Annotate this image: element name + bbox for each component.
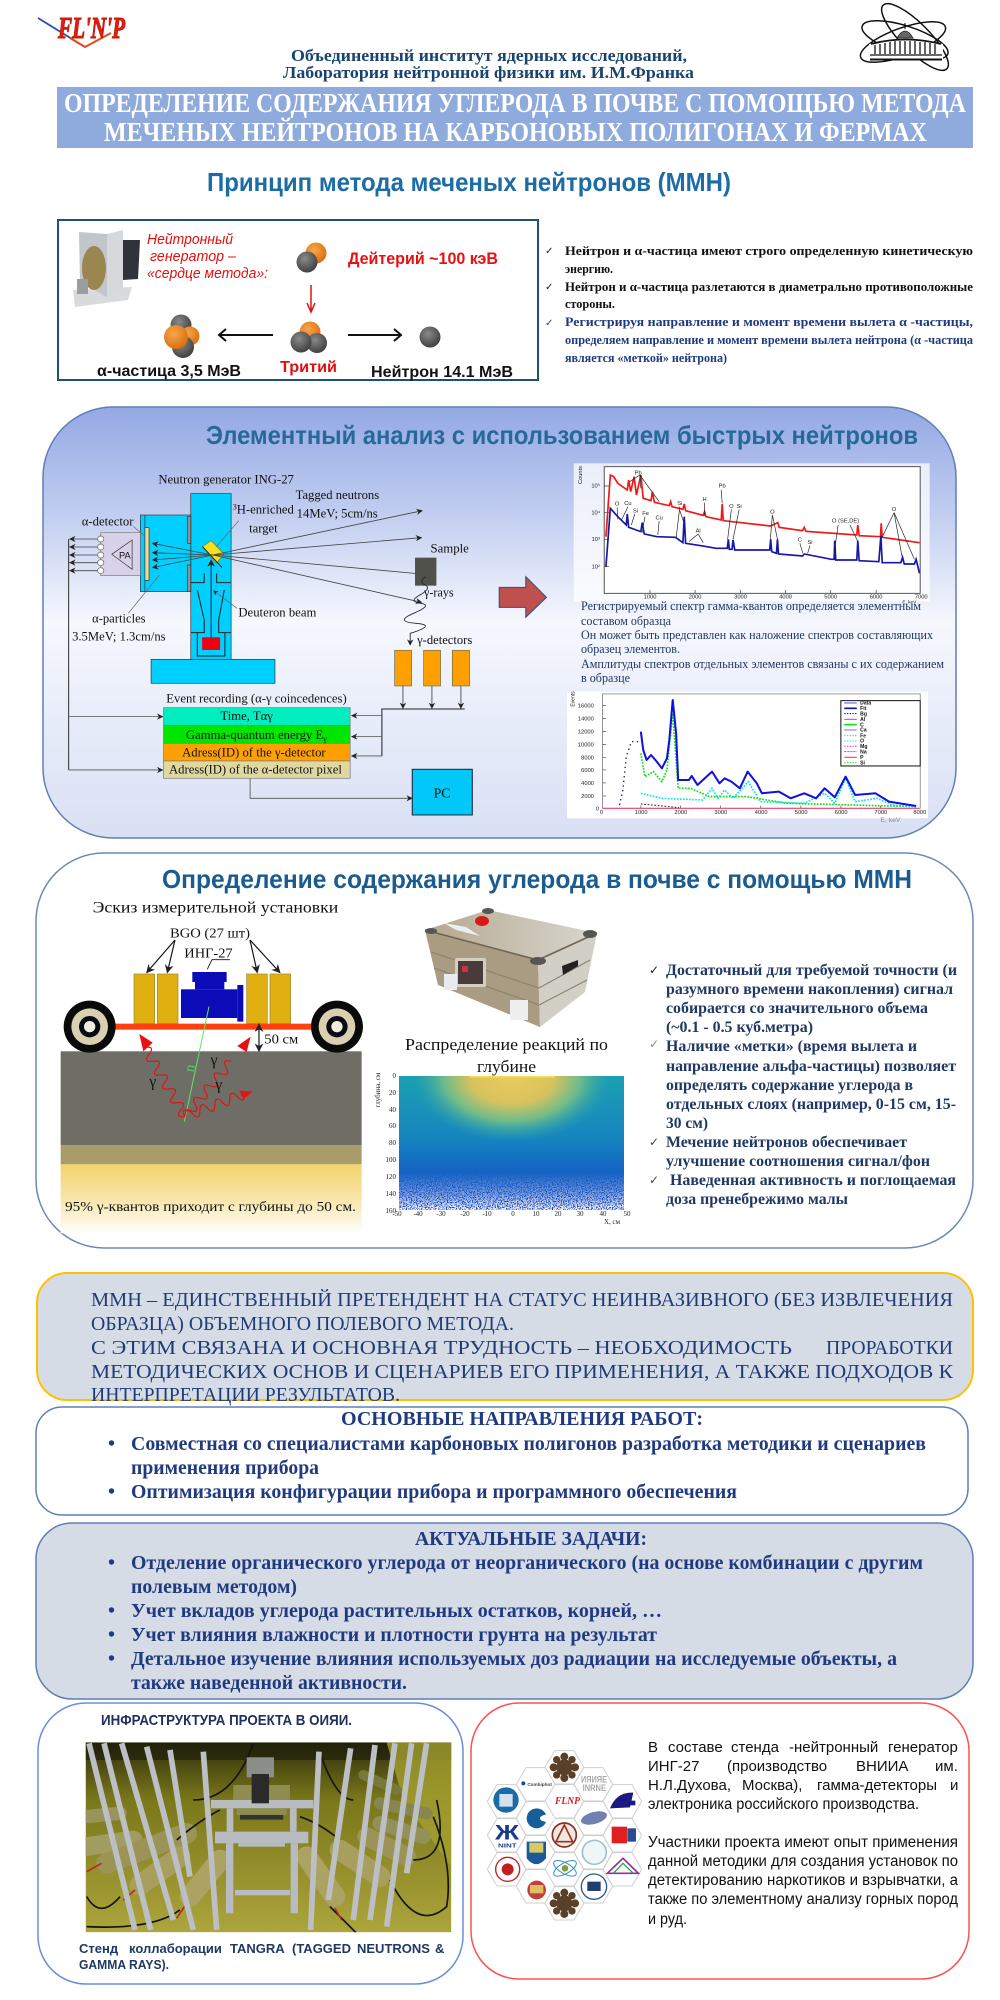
panel: main directions: •: [108, 1481, 115, 1503]
panel: main directions: •: [108, 1433, 115, 1455]
chart: depth heatmap: 0: [392, 1072, 396, 1080]
detector labels: 50 см: [264, 1032, 298, 1047]
generator labels: Deuteron beam: [238, 605, 317, 620]
panel: MMN statement: ИНТЕРПРЕТАЦИИ РЕЗУЛЬТАТОВ.: [91, 1384, 400, 1406]
generator body: [140, 494, 275, 683]
chart: fitted element spectra: 2000: [674, 810, 687, 816]
panel: current tasks: полевым методом): [131, 1576, 297, 1598]
caption: TANGRA: NEUTRONS: [357, 1941, 430, 1956]
heading: principle of the method: Принцип метода меченых нейтронов (ММН): [207, 167, 731, 197]
detector labels: [147, 927, 298, 1051]
chart: depth heatmap: 120: [386, 1173, 396, 1181]
chart: measured spectra: 2000: [689, 595, 701, 601]
text block: method advantages: [649, 962, 957, 1208]
panel: current tasks: •: [108, 1600, 115, 1622]
chart: fitted element spectra: 14000: [578, 717, 594, 723]
text block: method advantages: определять содержание углерода в: [666, 1077, 913, 1094]
text block: stand composition: составе: [668, 1739, 723, 1756]
PC box: [250, 769, 472, 815]
chart: fitted element spectra: 16000: [578, 704, 594, 710]
soil layers: [61, 1051, 362, 1233]
target: [202, 541, 224, 567]
event recording table: γ: [322, 735, 327, 744]
caption: reaction distribution: глубине: [477, 1057, 536, 1076]
panel: main directions: Оптимизация конфигурации прибора и программного обеспечения: [131, 1481, 737, 1503]
text block: spectrum explanation: Амплитуды спектров отдельных элементов связаны с их содержанием: [581, 656, 944, 671]
text block: method advantages: направление альфа-частицы) позволяет: [666, 1058, 956, 1075]
neutron and gamma paths: γ: [148, 1074, 156, 1091]
preamplifier: [69, 533, 163, 770]
chart: depth heatmap: 30: [576, 1210, 584, 1218]
depth note: 95% γ-квантов приходит с глубины до 50 см.: [65, 1200, 356, 1215]
chart legend: Data: [860, 701, 871, 707]
chart: fitted element spectra: 8000: [581, 755, 594, 761]
panel: JINR infrastructure: [38, 1703, 463, 1984]
chart: measured spectra: E, keV: [902, 599, 917, 604]
text: neutron generator note: Нейтронный: [147, 231, 234, 248]
chart: fitted element spectra: 0: [600, 810, 603, 816]
text block: stand composition: Н.Л.Духова,: [648, 1777, 731, 1794]
chart: depth heatmap: 40: [389, 1106, 396, 1114]
text block: method advantages: Наведенная активность и поглощаемая: [670, 1172, 956, 1189]
chart: measured spectra: Counts: [578, 466, 584, 484]
panel: current tasks: Учет влияния влажности и плотности грунта на результат: [131, 1624, 657, 1646]
chart legend: P: [860, 755, 864, 761]
chart: measured spectra: O: [729, 504, 734, 510]
neutron and gamma paths: γ: [210, 1052, 218, 1069]
chart: fitted element spectra: 5000: [795, 810, 808, 816]
chart legend: Mg: [860, 744, 868, 750]
caption: TANGRA: &: [435, 1941, 444, 1956]
chart: measured spectra: O: [615, 502, 620, 508]
chart legend: Ca: [860, 728, 867, 734]
header: institute name: [283, 46, 695, 82]
chart: measured spectra: 7000: [915, 595, 928, 601]
chart: measured spectra: C: [798, 538, 802, 544]
chart: fitted element spectra: 3000: [714, 810, 727, 816]
text block: method advantages: Наличие «метки» (время вылета и: [666, 1038, 917, 1055]
chart: measured spectra: 10²: [592, 564, 600, 570]
caption: TANGRA: TANGRA: [230, 1941, 285, 1956]
panel: main directions: [36, 1407, 968, 1515]
central stand: [211, 1800, 313, 1913]
detector labels: BGO (27 шт): [170, 927, 250, 942]
chart: measured spectra: 10³: [592, 537, 600, 543]
text block: method advantages: отдельных слоях (например, 0-15 см, 15-: [666, 1096, 956, 1113]
text block: spectrum explanation: образец элементов.: [581, 641, 680, 656]
text block: stand composition: детектированию наркотиков и взрывчатки, а: [648, 1872, 958, 1889]
text block: method advantages: ✓: [649, 963, 659, 977]
photo: TANGRA stand: [86, 1742, 451, 1933]
generator labels: Neutron generator ING-27: [158, 472, 294, 486]
panel: MMN statement: МЕТОДИЧЕСКИХ ОСНОВ И СЦЕНАРИЕВ ЕГО ПРИМЕНЕНИЯ, А ТАКЖЕ ПОДХОДОВ К: [91, 1361, 954, 1383]
text block: principle checklist: Регистрируя направление и момент времени вылета α -частицы,: [565, 314, 973, 329]
text block: stand composition: ВНИИА: [856, 1758, 908, 1775]
arrow: deuterium to tritium: [307, 285, 315, 312]
chart: depth heatmap: 80: [389, 1139, 396, 1147]
chart: measured spectra: 5000: [824, 595, 837, 601]
chart: measured spectra: [574, 463, 930, 604]
text block: spectrum explanation: в образце: [581, 670, 630, 685]
panel: MMN statement: ПРОРАБОТКИ: [826, 1337, 953, 1359]
text block: stand composition: им.: [935, 1758, 958, 1775]
panel: MMN statement: ОБРАЗЦА) ОБЪЕМНОГО ПОЛЕВОГО МЕТОДА.: [91, 1313, 514, 1335]
panel: current tasks: Отделение органического углерода от неорганического (на основе комбинации с другим: [131, 1552, 923, 1574]
text block: stand composition: [648, 1739, 958, 1928]
text block: stand composition: (производство: [727, 1758, 827, 1775]
chart: measured spectra: H: [703, 497, 707, 503]
title banner: [57, 87, 973, 148]
logos: participant hexagons: INRNE: [583, 1783, 606, 1793]
text block: principle checklist: является «меткой» нейтрона): [565, 350, 727, 365]
chart legend: Si: [860, 760, 866, 766]
text block: method advantages: ✓: [649, 1173, 659, 1187]
neutron and gamma paths: γ: [214, 1076, 222, 1093]
chart legend: [841, 701, 920, 766]
text block: principle checklist: Нейтрон и α-частица разлетаются в диаметрально противоположные: [565, 279, 973, 294]
text: neutron generator note: [147, 231, 268, 282]
chart: measured spectra: Si: [807, 540, 813, 546]
arrow: to neutron: [348, 329, 401, 341]
chart: depth heatmap: 50: [624, 1210, 631, 1218]
chart: fitted element spectra: 1000: [635, 810, 648, 816]
caption: reaction distribution: Распределение реакций по: [405, 1035, 608, 1054]
logos: participant hexagons: [487, 1751, 642, 1920]
chart: measured spectra: Cu: [655, 515, 663, 521]
chart: measured spectra: Si: [633, 508, 638, 514]
chart: depth heatmap: 40: [600, 1210, 607, 1218]
text block: stand composition: электроника российского производства.: [648, 1796, 919, 1813]
arrow: to spectra: [499, 577, 546, 617]
caption: TANGRA: Стенд: [79, 1941, 119, 1956]
caption: TANGRA: GAMMA RAYS).: [79, 1957, 169, 1972]
caption: TANGRA: [79, 1941, 444, 1972]
text block: method advantages: разумного времени накопления) сигнал: [666, 981, 953, 998]
particle rays: [152, 511, 422, 602]
chart: measured spectra: Si: [677, 501, 682, 507]
text: neutron generator note: «сердце метода»:: [147, 265, 268, 282]
label: tritium: Тритий: [280, 359, 337, 376]
event recording table: Gamma-quantum energy E: [186, 727, 331, 742]
text block: stand composition: генератор: [888, 1739, 958, 1756]
logo: JINR: [856, 0, 957, 79]
text block: method advantages: ✓: [649, 1135, 659, 1149]
chart: fitted element spectra: 4000: [581, 781, 594, 787]
generator labels: α-detector: [82, 514, 134, 528]
text block: stand composition: Москва),: [742, 1777, 802, 1794]
heading: elemental analysis: Элементный анализ с использованием быстрых нейтронов: [206, 420, 918, 450]
chart: depth heatmap: 140: [386, 1190, 396, 1198]
generator labels: 14MeV; 5cm/ns: [297, 506, 378, 520]
generator labels: Event recording (α-γ coincedences): [166, 691, 347, 706]
text block: principle checklist: ✓: [545, 282, 553, 293]
panel: current tasks: также наведенной активности.: [131, 1672, 407, 1694]
text block: stand composition: гамма-детекторы: [817, 1777, 937, 1794]
icon: alpha particle: [164, 314, 200, 358]
generator labels: [72, 472, 472, 706]
panel: current tasks: Учет вкладов углерода растительных остатков, корней, …: [131, 1600, 662, 1622]
chart: fitted element spectra: 0: [596, 807, 599, 813]
text block: stand composition: данной методики для создания установок по: [648, 1853, 958, 1870]
panel: main directions: Совместная со специалистами карбоновых полигонов разработка методики и сценариев: [131, 1433, 926, 1455]
chart: fitted element spectra: Events: [570, 691, 576, 707]
text block: method advantages: Достаточный для требуемой точности (и: [666, 962, 957, 979]
panel: current tasks: АКТУАЛЬНЫЕ ЗАДАЧИ:: [415, 1528, 647, 1550]
logo: FLNP: FL'N'P: [57, 10, 126, 45]
chart: measured spectra: 4000: [779, 595, 792, 601]
chart: fitted element spectra: 7000: [874, 810, 887, 816]
chart: measured spectra: Fe: [642, 511, 649, 517]
arrow: to alpha particle: [219, 329, 273, 341]
text block: spectrum explanation: Он может быть представлен как наложение спектров составляющих: [581, 627, 933, 642]
chart: measured spectra: 10⁵: [591, 483, 601, 490]
chart: measured spectra: Pb: [635, 471, 642, 477]
panel: elemental analysis: [43, 407, 956, 838]
text block: stand composition: стенда: [731, 1739, 780, 1756]
text block: method advantages: доза пренебрежимо малы: [666, 1191, 849, 1208]
event recording table: Adress(ID) of the α-detector pixel: [169, 762, 342, 776]
chart: depth heatmap: 60: [389, 1122, 396, 1130]
logos: participant hexagons: ИЯИЯЕ: [581, 1775, 607, 1785]
text block: principle checklist: Нейтрон и α-частица имеют строго определенную кинетическую: [565, 243, 973, 258]
caption: reaction distribution: [405, 1035, 608, 1076]
chart: measured spectra: Si: [737, 504, 742, 510]
event recording table: Time, Tαγ: [220, 708, 273, 723]
neutron and gamma paths: n: [182, 1062, 199, 1073]
panel: MMN statement: ММН – ЕДИНСТВЕННЫЙ ПРЕТЕНДЕНТ НА СТАТУС НЕИНВАЗИВНОГО (БЕЗ ИЗВЛЕЧЕНИЯ: [91, 1288, 953, 1311]
text block: method advantages: ✓: [649, 1037, 659, 1051]
label: alpha particle energy: α-частица 3,5 МэВ: [97, 363, 241, 380]
logo: FLNP: [38, 10, 126, 47]
preamplifier: PA: [119, 550, 132, 560]
heading: carbon determination: Определение содержания углерода в почве с помощью ММН: [162, 864, 912, 894]
chart: depth heatmap: 20: [554, 1210, 562, 1218]
chart legend: Bg: [860, 711, 867, 717]
chart: fitted element spectra: 6000: [581, 768, 594, 774]
chart: fitted element spectra: 2000: [581, 794, 594, 800]
chart: measured spectra: 10⁴: [591, 509, 601, 516]
caption: TANGRA: коллаборации: [129, 1941, 222, 1956]
cables: [87, 1743, 448, 1933]
chart: depth heatmap: X, см: [604, 1218, 621, 1226]
panel: MMN statement: С ЭТИМ СВЯЗАНА И ОСНОВНАЯ ТРУДНОСТЬ – НЕОБХОДИМОСТЬ: [91, 1337, 792, 1359]
chart legend: Al: [860, 717, 866, 723]
logos: participant hexagons: NINT: [498, 1844, 518, 1850]
text block: stand composition: и руд.: [648, 1911, 687, 1928]
text block: stand composition: и: [950, 1777, 958, 1794]
chart: fitted element spectra: E, keV: [881, 817, 901, 824]
chart: measured spectra: 1000: [644, 595, 656, 601]
chart: depth heatmap: 20: [389, 1089, 396, 1097]
chart: depth heatmap: 160: [386, 1207, 396, 1215]
panel: tagged neutron principle diagram: [58, 220, 538, 381]
chart: measured spectra: O (SE,DE): [832, 519, 859, 525]
panel: stand composition and participants: [471, 1703, 969, 1979]
chart: depth heatmap: глубина, см: [374, 1072, 382, 1107]
setup caption: Эскиз измерительной установки: [93, 900, 339, 917]
chart: fitted element spectra: 4000: [755, 810, 768, 816]
text block: spectrum explanation: Регистрируемый спектр гамма-квантов определяется элементным: [581, 598, 921, 613]
event recording table: [164, 708, 350, 778]
panel: carbon determination: [36, 853, 973, 1248]
icon: neutron generator: [73, 230, 140, 307]
text block: principle checklist: ✓: [545, 246, 553, 257]
diagram: neutron generator setup: [69, 472, 546, 815]
generator labels: α-particles: [92, 611, 146, 625]
text block: principle checklist: определяем направление и момент времени вылета нейтрона (α -частица: [565, 332, 973, 347]
text block: stand composition: ИНГ-27: [648, 1758, 699, 1775]
generator labels: Tagged neutrons: [296, 487, 379, 502]
text block: spectrum explanation: составом образца: [581, 613, 671, 628]
panel: main directions: ОСНОВНЫЕ НАПРАВЛЕНИЯ РАБОТ:: [341, 1408, 703, 1430]
generator labels: 3: [233, 502, 237, 511]
caption: TANGRA: (TAGGED: [292, 1941, 351, 1956]
detector cylinders: [86, 1775, 427, 1897]
chart: measured spectra: Pb: [719, 483, 726, 489]
chart: fitted element spectra: 10000: [578, 743, 594, 749]
header: institute name: Лаборатория нейтронной физики им. И.М.Франка: [283, 63, 695, 82]
chart: fitted element spectra: 8000: [913, 810, 926, 816]
panel: current tasks: [36, 1523, 973, 1699]
text block: principle checklist: энергию.: [565, 261, 613, 276]
chart: depth heatmap: -50: [392, 1210, 402, 1218]
diagram: measuring setup sketch: [61, 900, 363, 1233]
text block: stand composition: В: [648, 1739, 658, 1756]
cart with detectors: [64, 972, 363, 1053]
chart: depth heatmap: 10: [532, 1210, 540, 1218]
header: institute name: Объединенный институт ядерных исследований,: [291, 46, 687, 65]
chart: fitted element spectra: 6000: [835, 810, 848, 816]
text block: principle checklist: [545, 243, 973, 365]
text: neutron generator note: генератор –: [150, 248, 237, 265]
text block: stand composition: -нейтронный: [789, 1739, 878, 1756]
chart: depth heatmap: -30: [436, 1210, 446, 1218]
logos: participant hexagons: FLNP: [554, 1796, 581, 1807]
aluminium rods: [89, 1743, 427, 1930]
panel: MMN statement: [37, 1273, 973, 1406]
logos: participant hexagons: Ж: [494, 1820, 520, 1844]
logos: participant hexagons: Combiphot: [527, 1782, 552, 1787]
text block: method advantages: улучшение соотношения сигнал/фон: [666, 1153, 930, 1170]
chart: depth heatmap: -10: [482, 1210, 492, 1218]
icon: tritium nucleus: [290, 322, 327, 353]
chart legend: Fit: [860, 706, 867, 712]
chart: depth heatmap: 100: [386, 1156, 396, 1164]
heading: infrastructure: ИНФРАСТРУКТУРА ПРОЕКТА В ОИЯИ.: [101, 1712, 352, 1729]
chart: measured spectra: 6000: [870, 595, 883, 601]
text block: stand composition: Участники проекта имеют опыт применения: [648, 1834, 958, 1851]
chart legend: O: [860, 739, 864, 745]
chart: fitted element spectra: [567, 691, 928, 824]
text block: spectrum explanation: [581, 598, 944, 685]
icon: deuterium nucleus: [296, 242, 326, 272]
text block: method advantages: собирается со значительного объема: [666, 1000, 928, 1017]
label: deuterium: Дейтерий ~100 кэВ: [348, 249, 498, 268]
text block: method advantages: (~0.1 - 0.5 куб.метра): [666, 1019, 813, 1036]
panel: main directions: применения прибора: [131, 1457, 319, 1479]
panel: current tasks: •: [108, 1648, 115, 1670]
chart legend: C: [860, 722, 864, 728]
panel: current tasks: Детальное изучение влияния используемых доз радиации на исследуемые объекты, а: [131, 1648, 897, 1670]
chart: measured spectra: Cu: [624, 501, 632, 507]
chart: measured spectra: Al: [696, 528, 701, 534]
photo: instrument case: [425, 908, 597, 1027]
icon: neutron: [420, 326, 440, 348]
chart legend: Fe: [860, 733, 866, 739]
chart: measured spectra: 3000: [734, 595, 747, 601]
text block: stand composition: также по элементному анализу горных пород: [648, 1891, 958, 1908]
chart: measured spectra: O: [770, 509, 775, 515]
chart: depth heatmap: -40: [413, 1210, 423, 1218]
generator labels: Sample: [431, 541, 469, 556]
label: neutron energy: Нейтрон 14.1 МэВ: [371, 364, 513, 381]
chart: depth heatmap: -20: [460, 1210, 470, 1218]
chart: depth heatmap: [374, 1072, 630, 1225]
chart: measured spectra: O: [892, 507, 897, 513]
generator labels: γ-rays: [423, 585, 454, 600]
generator labels: H-enriched: [237, 502, 294, 516]
neutron and gamma paths: [139, 1007, 253, 1122]
generator labels: target: [249, 521, 278, 536]
chart legend: Na: [860, 749, 867, 755]
PC box: PC: [434, 786, 451, 800]
panel: current tasks: •: [108, 1624, 115, 1646]
sample and gamma detectors: [352, 558, 470, 756]
chart: fitted element spectra: 12000: [578, 730, 594, 736]
chart: depth heatmap: 0: [511, 1210, 515, 1218]
text block: principle checklist: ✓: [545, 318, 553, 329]
generator labels: γ-detectors: [416, 632, 472, 647]
panel: current tasks: •: [108, 1552, 115, 1574]
text block: method advantages: 30 см): [666, 1115, 708, 1132]
event recording table: Adress(ID) of the γ-detector: [182, 745, 326, 759]
detector labels: ИНГ-27: [184, 946, 233, 961]
text block: principle checklist: стороны.: [565, 296, 615, 311]
generator labels: 3.5MeV; 1.3cm/ns: [72, 629, 166, 644]
text block: method advantages: Мечение нейтронов обеспечивает: [666, 1134, 907, 1151]
